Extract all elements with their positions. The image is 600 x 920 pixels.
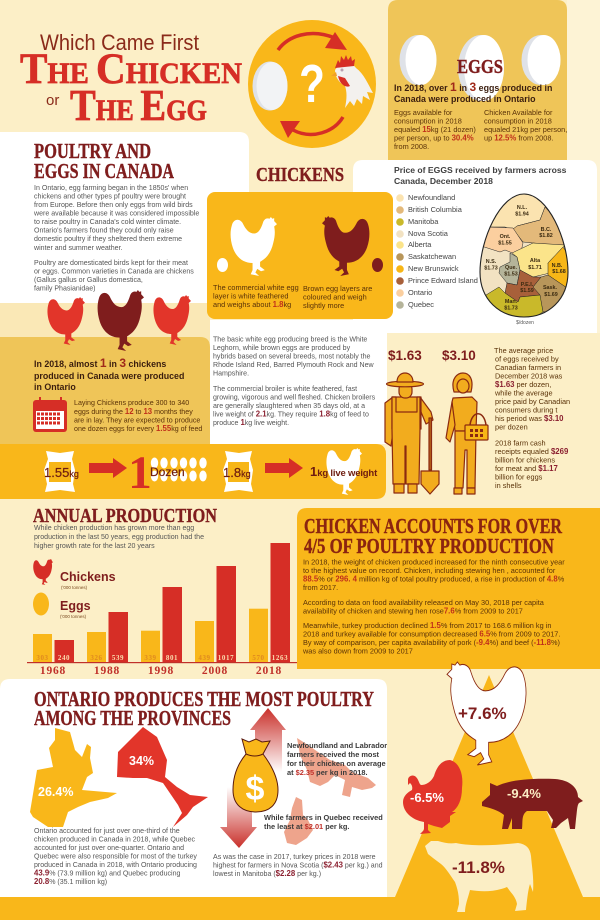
arrow: up <box>250 708 286 772</box>
arrow <box>89 458 127 478</box>
heading: AMONG THE PROVINCES <box>34 706 231 730</box>
panel: eggs <box>388 0 567 160</box>
dozen label: Dozen <box>150 465 185 479</box>
eggs available text: per person, up to 30.4% <box>394 134 474 142</box>
icon: pig -9.4% <box>482 779 583 829</box>
body text: to raise poultry in Canada's cold winter climate. <box>34 219 181 226</box>
legend: Quebec <box>408 300 434 309</box>
map: quebec pink <box>284 797 313 845</box>
legend: British Columbia <box>408 205 463 214</box>
panel: chicken statistic <box>0 337 210 444</box>
intro text: While chicken production has grown more than egg <box>34 525 194 532</box>
panel: chicken accounts for over 4/5 <box>297 508 600 669</box>
bar chart: 339 <box>144 654 157 662</box>
ontario text: 43.9% (73.9 million kg) and Quebec producing <box>34 868 180 878</box>
statistic text: produced in Canada were produced <box>34 371 184 381</box>
bar chart: 539 <box>112 654 124 662</box>
chicken available text: consumption in 2018 <box>484 116 552 126</box>
panel: breeds text: produce 1kg live weight. <box>213 418 289 427</box>
newfoundland text: for their chicken on average <box>287 759 386 768</box>
legend: eggs: ('000 tonnes) <box>60 614 87 619</box>
body text: was also down from 2009 to 2017 <box>302 646 413 656</box>
ontario text: 20.8% (35.1 million kg) <box>34 877 107 886</box>
egg map of prices: B.C. <box>541 227 551 233</box>
price text: of eggs received by <box>495 354 559 364</box>
white layer caption: The commercial white egg <box>213 283 299 292</box>
bar chart: 326 <box>90 654 103 662</box>
white layer caption: and weighs about 1.8kg <box>213 300 291 309</box>
legend: eggs <box>33 592 91 619</box>
icon: white hen +7.6%: +7.6% <box>458 704 507 723</box>
price labels <box>388 348 476 363</box>
legend: Nova Scotia <box>408 229 449 238</box>
statistic text: In 2018, almost 1 in 3 chickens <box>34 356 166 370</box>
bar chart: 1263 <box>272 654 288 662</box>
live weight label: 1kg live weight <box>310 464 378 479</box>
price text: $1.63 per dozen, <box>495 380 551 389</box>
chicken available text: equaled 21kg per person, <box>484 125 567 134</box>
heading: ONTARIO PRODUCES THE MOST POULTRY <box>34 687 374 711</box>
bar chart <box>27 543 297 677</box>
egg map of prices: Que. <box>505 265 517 271</box>
heading: chickens: CHICKENS <box>256 164 344 186</box>
body text: By way of comparison, per capita availability of pork (-9.4%) and beef (-11.8%) <box>303 638 560 647</box>
egg map of prices: $1.55 <box>498 240 512 246</box>
icon: white hen and egg <box>217 217 277 276</box>
icon: three white eggs <box>400 35 560 101</box>
laying text: eggs during the 12 to 13 months they <box>74 407 193 416</box>
central emblem: egg, question mark, hen <box>248 20 376 148</box>
price text: in shells <box>495 481 522 490</box>
icon: calendar <box>33 397 67 432</box>
body text: domestic poultry if they sheltered them extreme <box>34 236 182 243</box>
body text: In Ontario, egg farming began in the 1850s' when <box>34 185 188 192</box>
icon: three hens <box>47 290 191 351</box>
pyramid with animals <box>0 662 600 920</box>
panel: breeds text: hybrids based on several breeds, most notably the <box>213 354 371 360</box>
egg map of prices: Sask. <box>543 285 557 291</box>
body text: family Phasianidae) <box>34 286 96 292</box>
price text: billion for eggs <box>495 472 543 482</box>
body text: 88.5% or 296. 4 million kg of total poultry produced, a rise in production of 4.8% <box>303 574 564 584</box>
price text: Canadian farmers in <box>495 363 561 372</box>
newfoundland text: Newfoundland and Labrador <box>287 741 387 750</box>
eggs available text: consumption in 2018 <box>394 116 462 126</box>
ontario text: accounted for just over one-quarter. Ontario and <box>34 845 184 852</box>
egg map of prices: Man. <box>505 299 517 305</box>
price text: consumers during t <box>495 406 557 414</box>
legend: chickens <box>33 559 116 590</box>
icon: white hen <box>326 448 362 495</box>
quebec price text: the least at $2.01 per kg. <box>264 822 349 831</box>
map: quebec <box>30 728 117 827</box>
feed amount: 1.8kg <box>223 465 251 480</box>
laying text: one dozen eggs for every 1.55kg of feed <box>74 424 202 433</box>
egg map of prices: $1.59 <box>520 288 534 294</box>
bar chart: 2008 <box>202 665 228 677</box>
heading: POULTRY AND <box>34 139 151 163</box>
panel: breeds text: The basic white egg producing breed is the White <box>213 336 367 344</box>
price text: The average price <box>494 346 553 355</box>
panel: breeds text: Hampshire. <box>213 370 249 378</box>
legend <box>396 193 478 309</box>
egg map of prices: $1.69 <box>544 292 558 298</box>
brown layer caption: Brown egg layers are <box>303 284 372 293</box>
price heading: Canada, December 2018 <box>394 176 493 186</box>
bar chart: 570 <box>252 654 265 662</box>
panel: ontario produces the most poultry <box>0 679 387 897</box>
bar chart: 1968 <box>40 665 66 677</box>
icon: brown hen and egg <box>322 216 383 276</box>
map: quebec: 26.4% <box>38 785 73 799</box>
icon: money bag <box>233 739 278 812</box>
brown layer caption: coloured and weigh <box>303 292 367 302</box>
panel: breeds text: growing, vigorous and well fleshed. Chicken broilers <box>213 394 376 402</box>
bar chart: 240 <box>58 654 70 662</box>
arrow: down <box>220 787 257 848</box>
icon: pig -9.4%: -9.4% <box>507 786 541 801</box>
bar chart: 2018 <box>256 665 282 677</box>
price text: receipts equaled $269 <box>495 447 568 456</box>
egg map of prices: Ont. <box>500 234 510 240</box>
body text: from 2017. <box>303 583 338 592</box>
body text: Poultry are domesticated birds kept for their meat <box>34 260 188 267</box>
price text: for meat and $1.17 <box>495 464 558 473</box>
title <box>20 30 242 130</box>
egg map of prices: N.L. <box>517 205 527 211</box>
egg map of prices: $1.82 <box>539 233 553 239</box>
icon: cow -11.8%: -11.8% <box>452 858 505 877</box>
eggs available text: Eggs available for <box>394 108 452 117</box>
turkey text: As was the case in 2017, turkey prices in 2018 were <box>213 854 376 861</box>
egg map of prices <box>479 194 569 324</box>
price text: 2018 farm cash <box>495 438 546 448</box>
panel: breeds text: are generally slaughtered when 35 days old, at a <box>213 403 365 410</box>
title: or <box>46 92 59 109</box>
bar chart: 1988 <box>94 665 120 677</box>
icon: turkey -6.5%: -6.5% <box>410 790 444 805</box>
panel: breeds text: The commercial broiler is white feathered, fast <box>213 386 357 393</box>
newfoundland text: farmers received the most <box>287 750 380 759</box>
panel: price of eggs <box>353 160 597 333</box>
icon: cow -11.8% <box>425 841 533 912</box>
body text: (Gallus gallus or Gallus domestica, <box>34 277 143 284</box>
egg map of prices: $1.94 <box>515 212 529 218</box>
ontario text: Quebec were also responsible for most of the turkey <box>34 854 197 860</box>
body text: winter and summer weather. <box>33 245 123 252</box>
body text: According to data on food availability released on May 30, 2018 per capita <box>303 598 545 607</box>
intro text: production in the last 50 years, egg production had the <box>34 534 204 541</box>
statistic text: in Ontario <box>34 382 76 392</box>
laying text: are in lay. They are expected to produce <box>74 416 200 424</box>
title: THE CHICKEN <box>20 46 242 93</box>
legend: chickens: ('000 tonnes) <box>61 585 88 590</box>
eggs statistic: In 2018, over 1 in 3 eggs produced in <box>394 80 552 94</box>
price labels: $3.10 <box>442 348 476 363</box>
bar chart: 1017 <box>218 654 234 662</box>
chicken available text: up 12.5% from 2008. <box>484 134 553 142</box>
map: newfoundland and labrador <box>297 738 376 797</box>
heading: eggs: EGGS <box>457 56 503 78</box>
icon: feed sack <box>223 451 253 492</box>
panel: breeds text <box>210 320 387 444</box>
laying text: Laying Chickens produce 300 to 340 <box>74 399 189 407</box>
turkey text: highest for farmers in Nova Scotia ($2.43 per kg.) and <box>213 860 383 870</box>
price labels: $1.63 <box>388 348 422 363</box>
icon: woman with basket <box>446 373 488 494</box>
panel: poultry and eggs in canada <box>0 132 249 303</box>
price text: price paid by Canadian <box>495 397 570 406</box>
chicken available text: Chicken Available for <box>484 108 552 117</box>
body text: were available because it was considered impossible <box>33 210 199 218</box>
panel: breeds text: Leghorn, while brown eggs are produced by <box>213 345 351 352</box>
heading: EGGS IN CANADA <box>34 159 175 183</box>
arrow <box>265 458 303 478</box>
ontario text: Ontario accounted for just over one-third of the <box>34 828 180 835</box>
legend: Prince Edward Island <box>408 276 478 285</box>
body text: 2018 and turkey available for consumption decreased 6.5% from 2009 to 2017. <box>303 630 560 638</box>
icon: white hen +7.6% <box>447 662 526 765</box>
egg map of prices: $1.73 <box>504 306 518 312</box>
price heading: Price of EGGS received by farmers across <box>394 165 566 175</box>
body text: from Europe. Before then only eggs from wild birds <box>34 202 193 209</box>
panel: breeds text: Rhode Island Red, Barred Plymouth Rock and New <box>213 362 375 369</box>
feed amount: 1.55kg <box>44 465 79 480</box>
legend: Manitoba <box>408 217 439 226</box>
annual production section <box>27 505 297 677</box>
ontario text: chicken produced in Canada in 2018, while Quebec <box>34 836 195 844</box>
map: ontario <box>117 727 208 827</box>
egg map of prices: N.B. <box>552 263 562 269</box>
intro text: higher growth rate for the last 20 years <box>34 543 155 550</box>
egg map of prices: $1.73 <box>484 266 498 272</box>
legend: Alberta <box>408 240 432 249</box>
bar chart: 439 <box>198 654 211 662</box>
panel: breeds text: live weight of 2.1kg. They require 1.8kg of feed to <box>213 410 369 418</box>
heading: ANNUAL PRODUCTION <box>33 505 217 527</box>
title: THE EGG <box>70 81 207 130</box>
egg map of prices: N.S. <box>486 259 496 265</box>
eggs available text: equaled 15kg (21 dozen) <box>394 125 476 134</box>
egg map of prices: Alta <box>530 258 540 264</box>
egg map of prices: $1.53 <box>504 272 518 278</box>
white layer caption: layer is white feathered <box>213 292 289 300</box>
icon: feed sack <box>44 451 75 492</box>
icon: money bag: $ <box>246 770 265 808</box>
price text: billion for chickens <box>495 456 555 464</box>
panel: chicken layers <box>207 192 393 319</box>
egg map of prices: $1.71 <box>528 265 542 271</box>
map: ontario: 34% <box>129 754 154 768</box>
legend: Ontario <box>408 288 432 297</box>
eggs statistic: Canada were produced in Ontario <box>394 94 536 104</box>
newfoundland text: at $2.35 per kg in 2018. <box>287 768 368 777</box>
body text: Ontario's farmers found they could only raise <box>34 228 174 234</box>
legend: New Brunswick <box>408 264 459 273</box>
ontario text: produced in Canada in 2018, with Ontario producing <box>34 862 197 869</box>
body text: to the highest value on record. Chicken, including stewing hen , accounted for <box>303 566 556 575</box>
body text: chickens and other types pf poultry were brought <box>34 194 186 200</box>
egg map of prices: $1.68 <box>552 269 566 275</box>
big number one: 1 <box>128 447 152 499</box>
price text: his period was $3.10 <box>495 414 564 423</box>
body text: or eggs. Common varieties in Canada are chickens <box>34 268 194 276</box>
legend: chickens: Chickens <box>60 570 116 584</box>
icon: turkey -6.5% <box>403 760 462 834</box>
legend: Saskatchewan <box>408 252 456 261</box>
bar chart: 303 <box>36 654 49 662</box>
body text: Meanwhile, turkey production declined 1.5% from 2017 to 168.6 million kg in <box>303 621 551 630</box>
eggs available text: from 2008. <box>394 142 429 151</box>
egg map of prices: P.E.I. <box>521 282 533 288</box>
legend: eggs: Eggs <box>60 599 91 613</box>
central emblem: egg, question mark, hen: ? <box>299 54 325 114</box>
price text: per dozen <box>495 422 528 432</box>
brown layer caption: slightly more <box>303 301 344 310</box>
turkey text: lowest in Manitoba ($2.28 per kg.) <box>213 869 321 878</box>
panel: farm prices <box>385 333 600 500</box>
price text: while the average <box>494 388 553 398</box>
icon: farmer with shovel <box>385 373 439 494</box>
bar chart: 1998 <box>148 665 174 677</box>
icon: dozen eggs <box>151 458 207 482</box>
price text: December 2018 was <box>495 372 563 380</box>
body text: availability of chicken and stewing hen rose7.6% from 2009 to 2017 <box>303 606 523 616</box>
body text: In 2018, the weight of chicken produced increased for the ninth consecutive year <box>303 558 565 566</box>
legend: Newfoundland <box>408 193 455 202</box>
bar chart: 801 <box>166 654 178 662</box>
feed conversion band <box>0 444 386 499</box>
quebec price text: While farmers in Quebec received <box>264 813 383 822</box>
egg map of prices: $/dozen <box>516 320 534 326</box>
title: Which Came First <box>40 30 199 55</box>
